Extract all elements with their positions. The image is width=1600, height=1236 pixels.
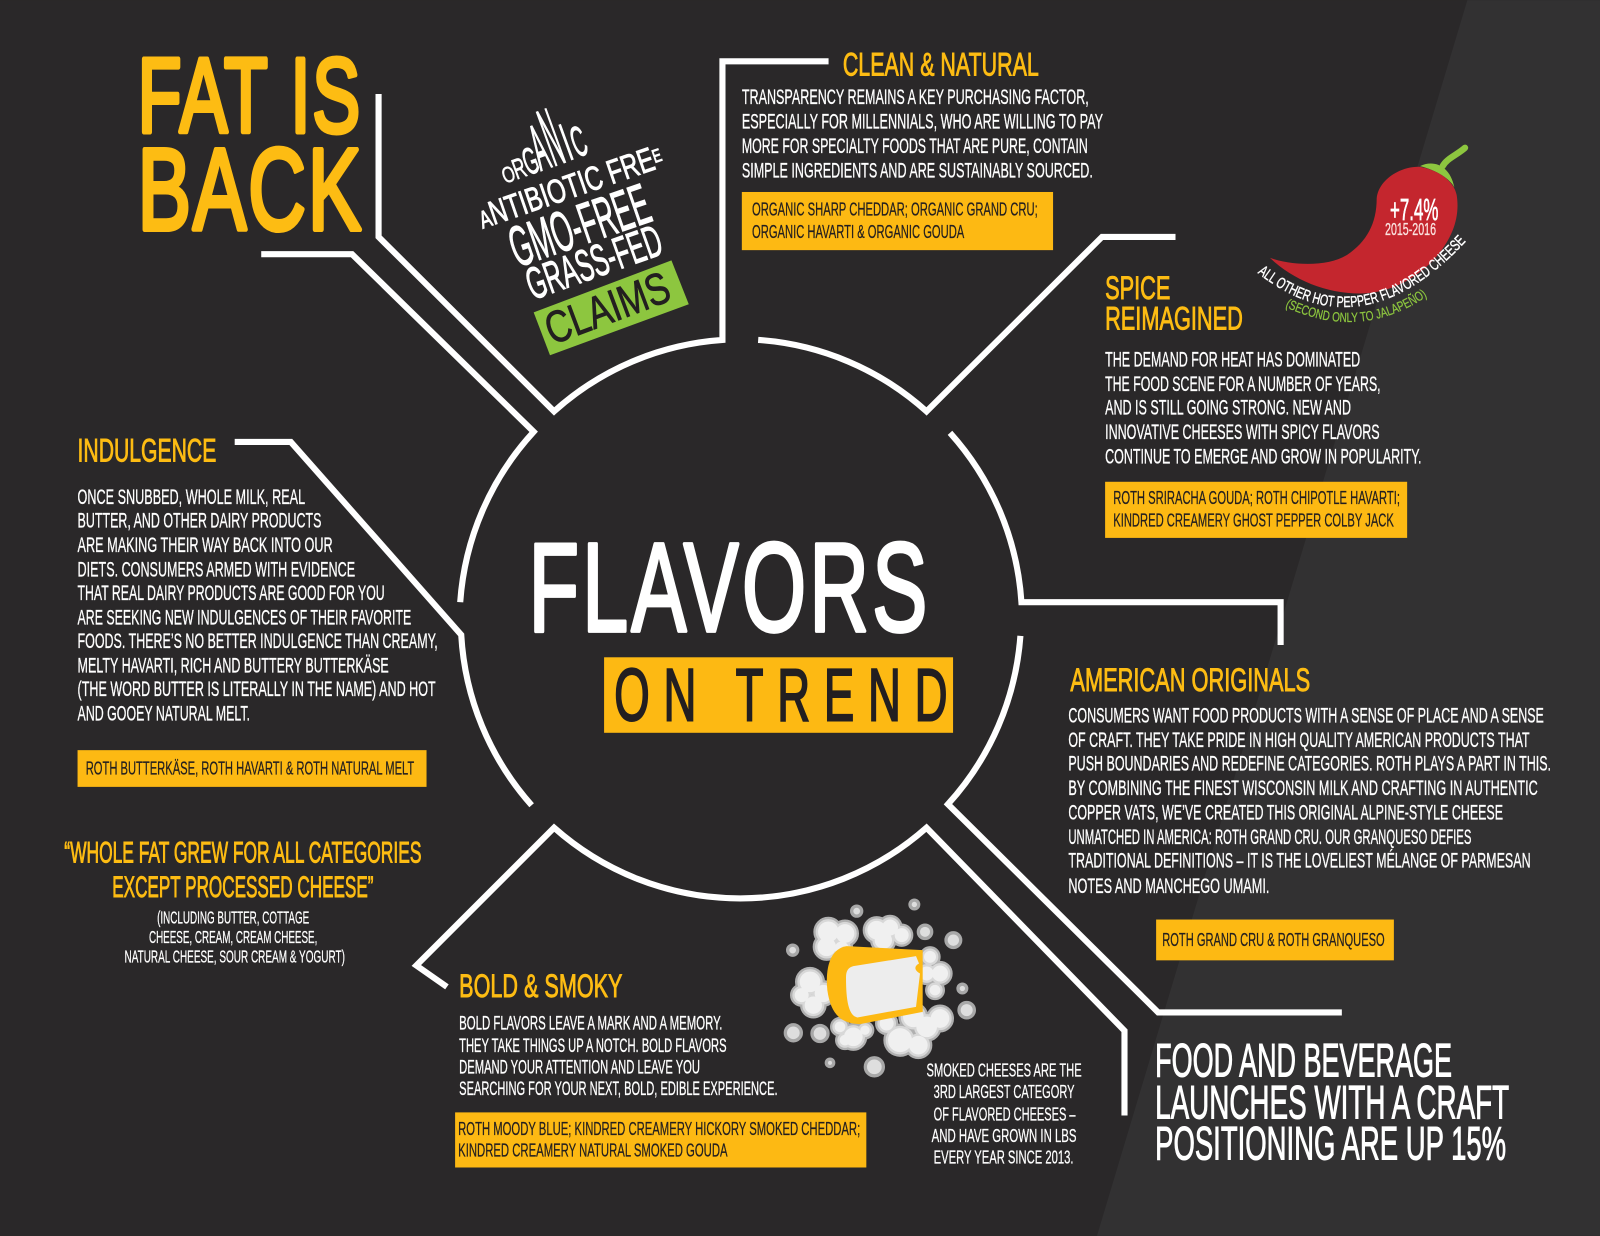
body text: MORE FOR SPECIALTY FOODS THAT ARE PURE, CONTAIN <box>742 135 1088 158</box>
body text: NOTES AND MANCHEGO UMAMI. <box>1068 875 1269 898</box>
body text <box>742 86 1103 183</box>
panel: indulgence <box>78 431 438 787</box>
quote <box>64 836 421 904</box>
product box: KINDRED CREAMERY NATURAL SMOKED GOUDA <box>458 1139 728 1160</box>
title word: flavors: FLAVORS <box>529 516 931 658</box>
word: organic <box>480 83 596 201</box>
title: flavors on trend <box>529 516 961 737</box>
word: organic: A <box>521 112 558 185</box>
text block: smoked cheeses stat: AND HAVE GROWN IN LBS <box>932 1125 1077 1146</box>
panel: bold and smoky <box>455 967 866 1167</box>
product box: KINDRED CREAMERY GHOST PEPPER COLBY JACK <box>1113 510 1394 531</box>
panel: spice reimagined <box>1105 269 1421 538</box>
body text: DEMAND YOUR ATTENTION AND LEAVE YOU <box>459 1057 700 1079</box>
chili stem <box>1420 148 1465 187</box>
body text: ARE MAKING THEIR WAY BACK INTO OUR <box>78 534 333 557</box>
body text <box>78 486 438 726</box>
body text: ESPECIALLY FOR MILLENNIALS, WHO ARE WILLING TO PAY <box>742 111 1103 134</box>
word: gmo-free: GMO-FREE <box>501 172 659 280</box>
product box: ROTH SRIRACHA GOUDA; ROTH CHIPOTLE HAVARTI; <box>1113 487 1400 508</box>
body text: ONCE SNUBBED, WHOLE MILK, REAL <box>78 486 305 509</box>
heading: fat is back <box>138 37 363 255</box>
quote note: NATURAL CHEESE, SOUR CREAM & YOGURT) <box>124 946 345 966</box>
body text: THE DEMAND FOR HEAT HAS DOMINATED <box>1105 348 1360 371</box>
panel: clean and natural <box>742 46 1103 250</box>
product box <box>1156 920 1394 960</box>
heading: fat is back: FAT IS <box>138 37 362 155</box>
word: antibiotic free: ANTIBIOTIC FRE <box>476 118 726 234</box>
quote: “WHOLE FAT GREW FOR ALL CATEGORIES <box>64 836 421 869</box>
connector lines and central circle <box>235 61 1342 1115</box>
callout: whole fat quote <box>64 836 421 966</box>
body text: ARE SEEKING NEW INDULGENCES OF THEIR FAVORITE <box>78 607 411 630</box>
text block: smoked cheeses stat: EVERY YEAR SINCE 2013. <box>934 1146 1073 1167</box>
word: organic: C <box>564 118 594 167</box>
chili stat: +7.4% <box>1390 193 1438 227</box>
text block: smoked cheeses stat <box>927 1060 1082 1167</box>
panel: american originals <box>1068 661 1551 960</box>
word: organic: R <box>508 153 531 186</box>
heading: CLEAN & NATURAL <box>843 46 1039 83</box>
quote: EXCEPT PROCESSED CHEESE” <box>112 871 373 904</box>
body text: (THE WORD BUTTER IS LITERALLY IN THE NAME) AND HOT <box>78 678 436 701</box>
product box <box>78 750 427 787</box>
product box: ORGANIC HAVARTI & ORGANIC GOUDA <box>752 221 965 242</box>
icon: chili pepper <box>1257 144 1468 322</box>
body text: AND GOOEY NATURAL MELT. <box>78 703 250 726</box>
subtitle badge: on trend: ON TREND <box>614 654 961 737</box>
quote note: (INCLUDING BUTTER, COTTAGE <box>157 908 309 928</box>
body text: FOODS. THERE’S NO BETTER INDULGENCE THAN CREAMY, <box>78 630 438 653</box>
body text: BUTTER, AND OTHER DAIRY PRODUCTS <box>78 510 321 533</box>
body text: MELTY HAVARTI, RICH AND BUTTERY BUTTERKÄSE <box>78 655 389 678</box>
body text: SIMPLE INGREDIENTS AND ARE SUSTAINABLY SOURCED. <box>742 160 1093 183</box>
heading: AMERICAN ORIGINALS <box>1070 661 1310 698</box>
body text: TRANSPARENCY REMAINS A KEY PURCHASING FACTOR, <box>742 86 1089 109</box>
body text: BOLD FLAVORS LEAVE A MARK AND A MEMORY. <box>459 1013 722 1035</box>
word: organic: N <box>529 91 573 183</box>
body text: THAT REAL DAIRY PRODUCTS ARE GOOD FOR YOU <box>78 582 385 605</box>
subtitle badge: on trend <box>604 654 961 737</box>
text block: smoked cheeses stat: SMOKED CHEESES ARE THE <box>927 1060 1082 1081</box>
quote note <box>124 908 345 966</box>
quote note: CHEESE, CREAM, CREAM CHEESE, <box>149 927 317 947</box>
callout: craft launches stat <box>1155 1035 1509 1169</box>
body text <box>1068 705 1551 898</box>
chili caption: ALL OTHER HOT PEPPER FLAVORED CHEESE <box>1257 234 1466 308</box>
heading: SPICE <box>1105 269 1170 306</box>
claims badge: CLAIMS <box>538 261 677 354</box>
icon: claims word stack <box>473 83 689 355</box>
body text: THE FOOD SCENE FOR A NUMBER OF YEARS, <box>1105 373 1381 396</box>
product box: ROTH GRAND CRU & ROTH GRANQUESO <box>1162 929 1385 950</box>
product box: ORGANIC SHARP CHEDDAR; ORGANIC GRAND CRU; <box>752 198 1038 219</box>
text block: smoked cheeses stat: 3RD LARGEST CATEGORY <box>934 1081 1075 1102</box>
smoke clouds <box>787 902 973 1074</box>
body text: SEARCHING FOR YOUR NEXT, BOLD, EDIBLE EXPERIENCE. <box>459 1078 778 1100</box>
word: organic: I <box>553 113 579 171</box>
chili years: 2015-2016 <box>1385 219 1436 239</box>
body text: AND IS STILL GOING STRONG. NEW AND <box>1105 396 1351 419</box>
heading: fat is back: BACK <box>138 125 363 255</box>
product box <box>455 1112 866 1167</box>
heading: BOLD & SMOKY <box>459 967 623 1004</box>
word: antibiotic free: E <box>649 144 664 167</box>
word: grass-fed: GRASS-FED <box>519 214 669 310</box>
word: organic: O <box>498 161 519 189</box>
body text: DIETS. CONSUMERS ARMED WITH EVIDENCE <box>78 559 355 582</box>
body text: THEY TAKE THINGS UP A NOTCH. BOLD FLAVORS <box>459 1035 727 1057</box>
text block: smoked cheeses stat: OF FLAVORED CHEESES – <box>934 1104 1076 1125</box>
body text <box>1105 348 1421 468</box>
heading <box>1105 269 1243 337</box>
icon: smoking cheese <box>787 902 973 1074</box>
product box: ROTH MOODY BLUE; KINDRED CREAMERY HICKORY SMOKED CHEDDAR; <box>458 1118 860 1139</box>
cheese wedge <box>827 946 923 1024</box>
body text: INNOVATIVE CHEESES WITH SPICY FLAVORS <box>1105 421 1380 444</box>
word: organic: G <box>517 139 545 184</box>
product box <box>742 192 1053 250</box>
heading: INDULGENCE <box>78 431 216 468</box>
product box: ROTH BUTTERKÄSE, ROTH HAVARTI & ROTH NATURAL MELT <box>86 758 415 779</box>
chili body <box>1270 167 1458 293</box>
heading: REIMAGINED <box>1105 300 1243 337</box>
body text <box>459 1013 778 1100</box>
chili sub caption: (SECOND ONLY TO JALAPEÑO) <box>1286 289 1427 322</box>
product box <box>1105 482 1407 538</box>
